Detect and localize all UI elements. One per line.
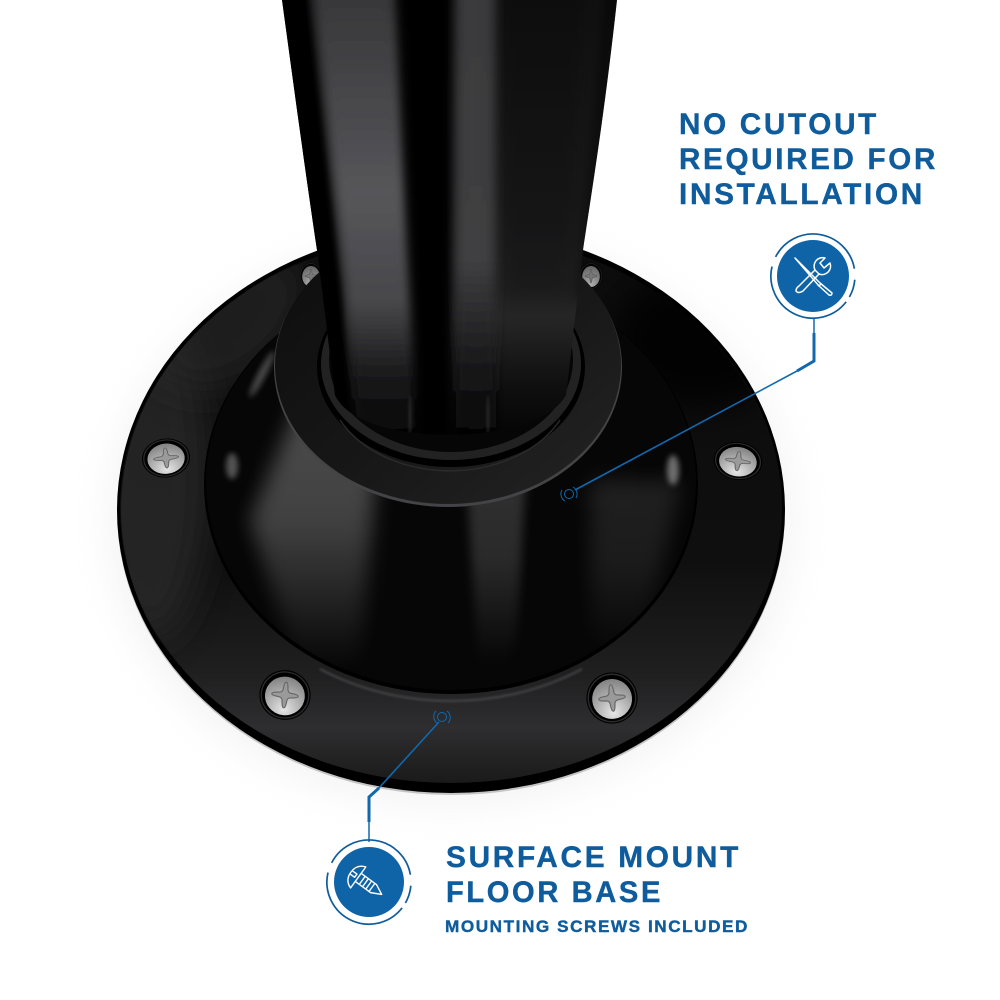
post (282, 0, 617, 432)
screws on flange (140, 262, 765, 726)
cone bowl (222, 348, 688, 663)
heading: no cutout required for installation: REQUIRED FOR (679, 143, 938, 176)
icon: crossed wrench and screwdriver (795, 258, 832, 295)
heading: no cutout required for installation: NO CUTOUT (679, 108, 879, 141)
collar (274, 226, 622, 507)
base flange (90, 217, 790, 795)
icon ring (327, 840, 411, 924)
heading: no cutout required for installation (679, 108, 938, 211)
floor base product illustration (90, 0, 790, 795)
callout: screw icon with leader line (327, 711, 450, 924)
leader line to collar (561, 318, 814, 501)
text: surface mount floor base (445, 841, 749, 936)
text: surface mount floor base: MOUNTING SCREWS INCLUDED (445, 917, 749, 936)
icon ring (771, 234, 855, 318)
icon disc (334, 847, 404, 917)
leader line to flange (369, 711, 450, 842)
text: surface mount floor base: SURFACE MOUNT (446, 841, 741, 874)
text: surface mount floor base: FLOOR BASE (446, 876, 663, 909)
callout: tools icon with leader line (561, 234, 855, 501)
heading: no cutout required for installation: INSTALLATION (679, 178, 925, 211)
background shadow (109, 235, 793, 805)
icon: mounting screw (343, 862, 389, 905)
icon disc (777, 240, 849, 312)
